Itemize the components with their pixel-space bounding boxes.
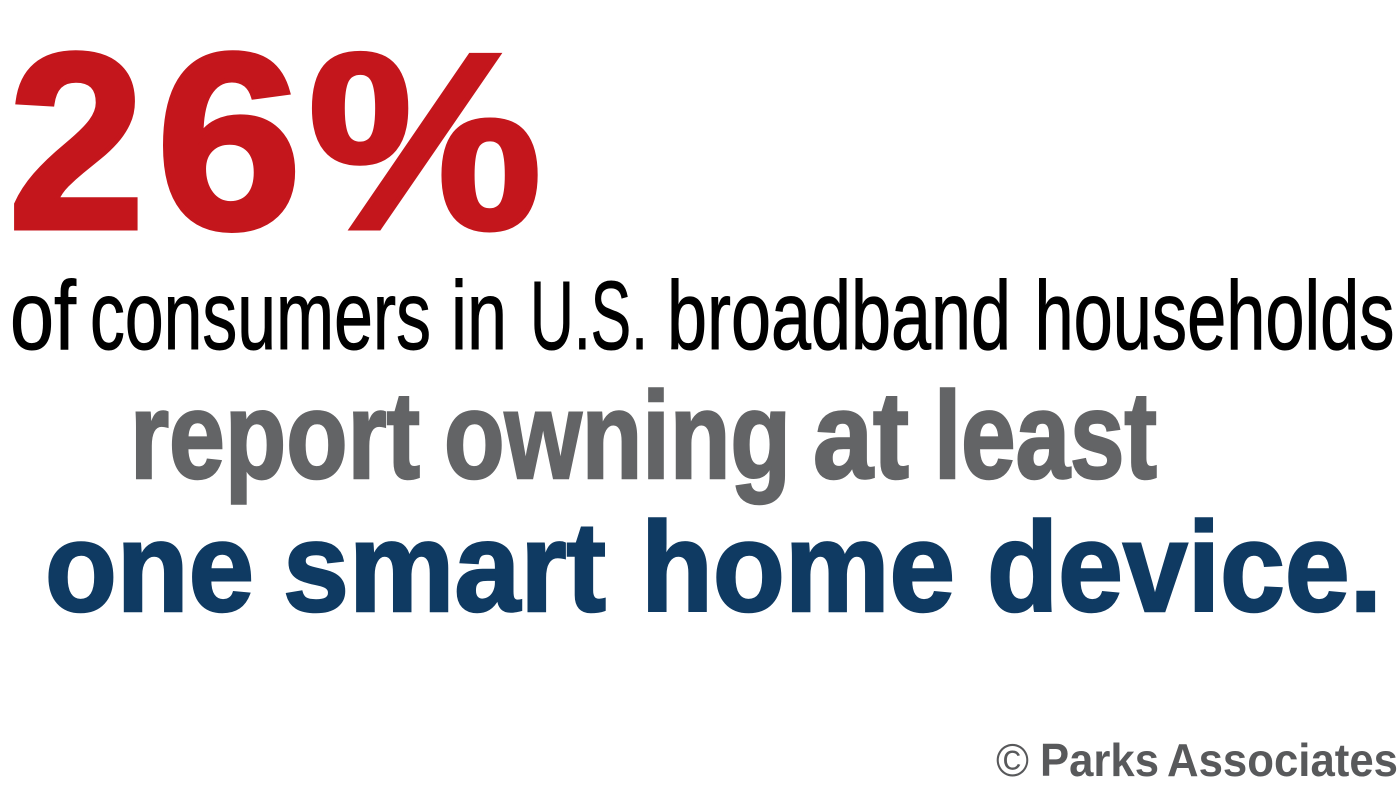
text line: report owning at least: least — [934, 368, 1157, 505]
text line: report owning at least: owning — [444, 368, 791, 505]
headline statistic: 26%: 6 — [156, 2, 302, 282]
text line: report owning at least — [130, 368, 1157, 505]
text line: of consumers in U.S. broadband households — [10, 261, 1394, 370]
text line: report owning at least: report — [130, 368, 420, 505]
copyright credit: © — [996, 734, 1029, 786]
copyright credit: Parks — [1040, 734, 1159, 786]
text line: one smart home device. — [45, 496, 1382, 638]
text line: one smart home device.: smart — [283, 496, 606, 638]
text line: one smart home device.: one — [45, 496, 254, 638]
text line: of consumers in U.S. broadband households: of — [10, 261, 77, 370]
text line: of consumers in U.S. broadband households: consumers — [90, 261, 431, 370]
text line: of consumers in U.S. broadband households: broadband — [667, 261, 1011, 370]
headline statistic: 26%: 2 — [8, 2, 145, 282]
text line: one smart home device.: home — [641, 496, 955, 638]
text line: of consumers in U.S. broadband households: in — [451, 261, 507, 370]
text line: of consumers in U.S. broadband households: U.S. — [530, 261, 648, 370]
copyright credit — [996, 734, 1398, 786]
headline statistic: 26% — [8, 2, 542, 282]
text line: report owning at least: at — [813, 368, 909, 505]
headline statistic: 26%: % — [308, 2, 542, 282]
